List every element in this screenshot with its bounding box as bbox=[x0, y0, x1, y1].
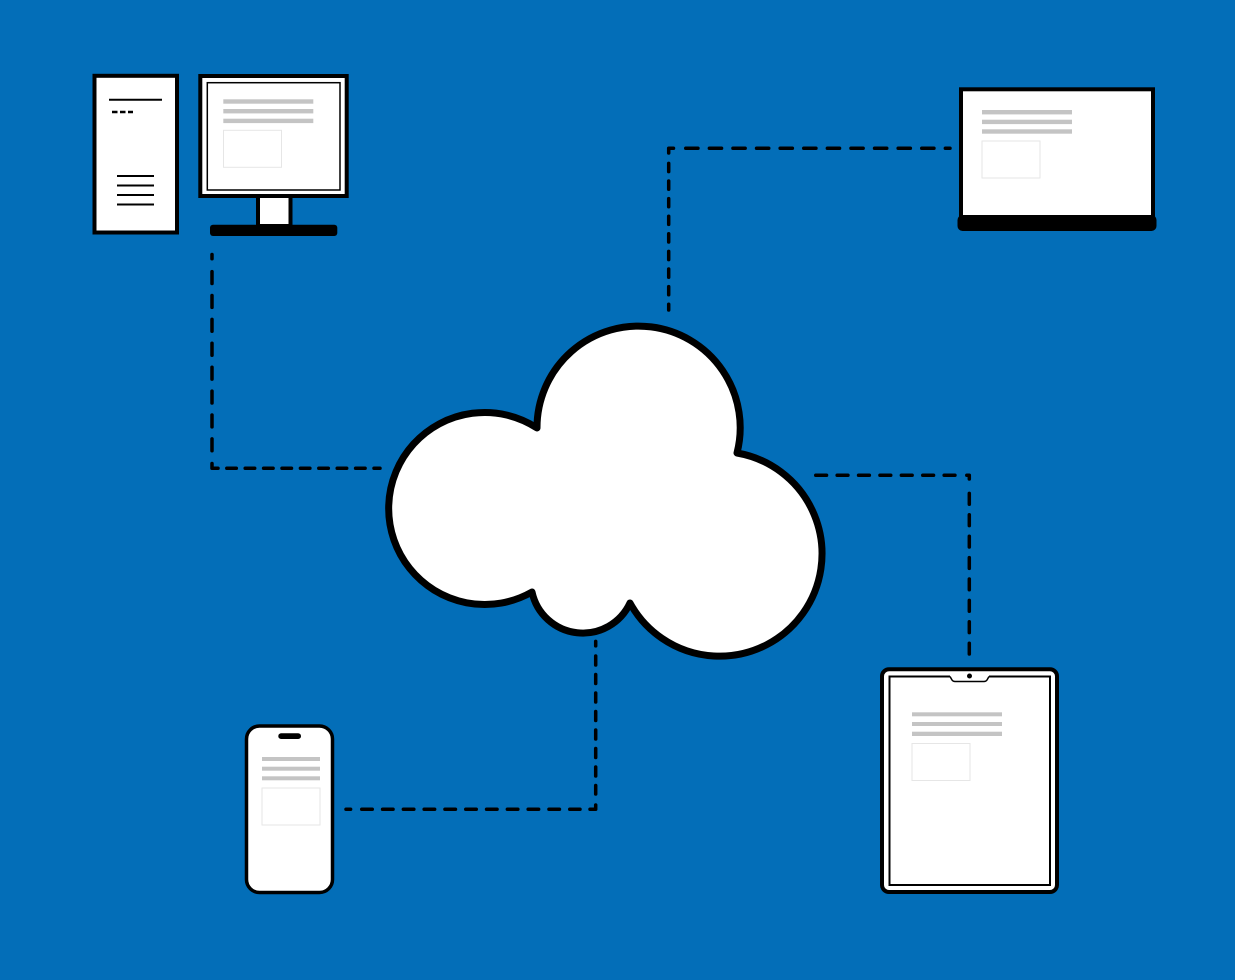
dashed connector: laptop to cloud bbox=[669, 148, 950, 310]
dashed connector: tablet to cloud bbox=[816, 475, 969, 654]
icon: laptop bbox=[958, 89, 1156, 231]
icon: tablet bbox=[882, 669, 1057, 892]
icon: desktop monitor bbox=[200, 76, 347, 236]
dashed connector: phone to cloud bbox=[346, 641, 596, 809]
dashed connector: desktop to cloud bbox=[212, 254, 380, 468]
icon: desktop tower bbox=[94, 76, 177, 232]
icon: cloud bbox=[389, 326, 822, 656]
icon: smartphone bbox=[246, 726, 332, 892]
